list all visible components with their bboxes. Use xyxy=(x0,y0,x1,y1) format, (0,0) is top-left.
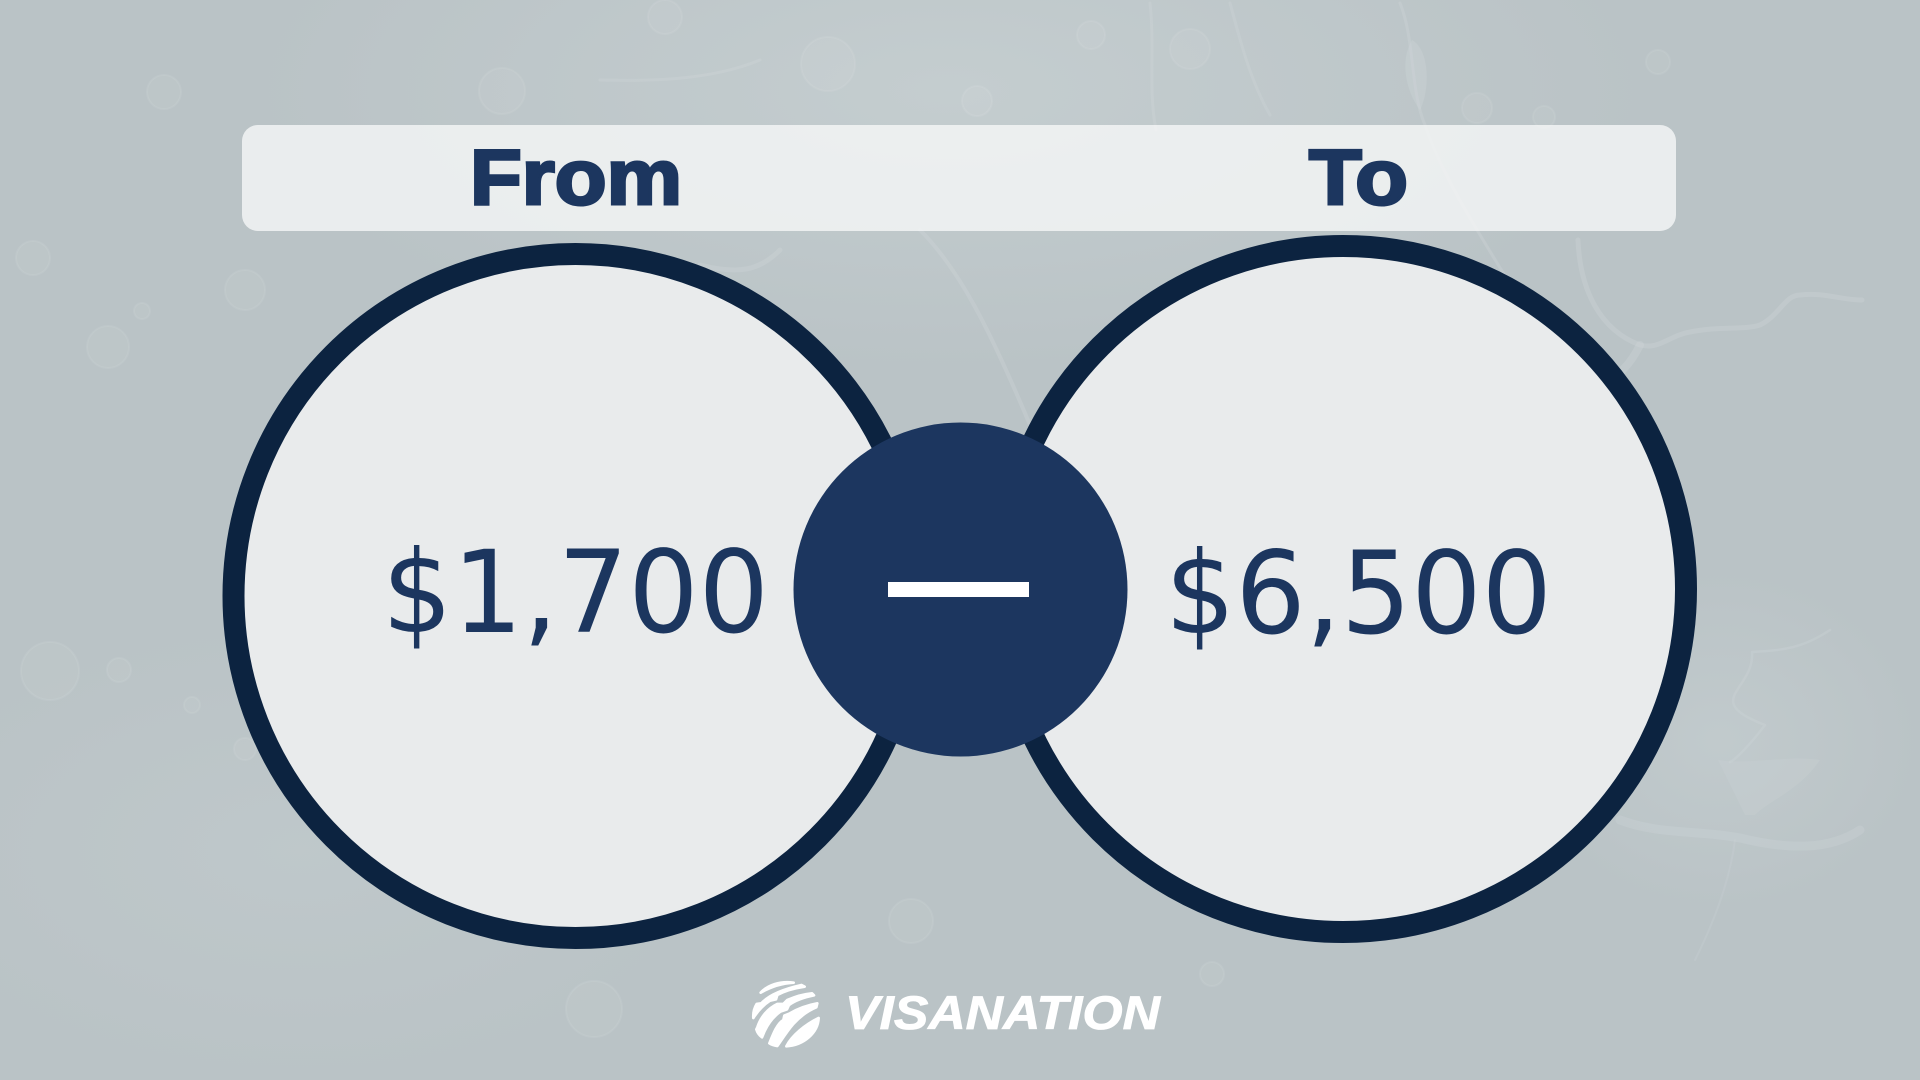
logo: VisaNation xyxy=(753,982,1161,1046)
icon: striped globe xyxy=(753,982,819,1046)
heading: To: To xyxy=(1309,133,1408,221)
value: $6,500: $6,500 xyxy=(1165,527,1552,660)
value: $1,700: $1,700 xyxy=(382,526,769,659)
header bar: From / To xyxy=(242,125,1676,231)
panel: from amount circle xyxy=(234,251,918,938)
icon: dash xyxy=(888,582,1029,597)
connector circle with dash xyxy=(794,422,1128,756)
panel: to amount circle xyxy=(1000,246,1686,932)
heading: From: From xyxy=(470,133,682,221)
wordmark: VISANATION xyxy=(845,986,1161,1039)
